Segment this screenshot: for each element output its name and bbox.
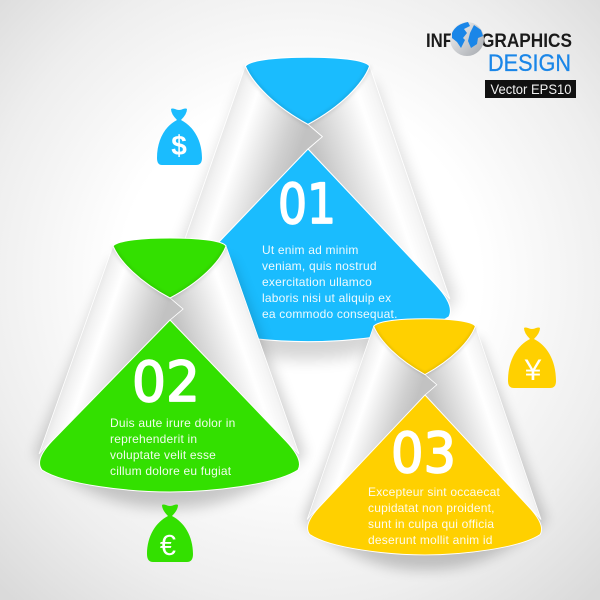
text block 01: ea commodo consequat. [262, 307, 398, 321]
text block 02: reprehenderit in [110, 432, 197, 446]
label: vector eps10: Vector EPS10 [490, 82, 572, 97]
logo title: infographics [426, 30, 572, 52]
panel: step 01 blue cone [160, 57, 456, 360]
text block 03: deserunt mollit anim id [368, 533, 493, 547]
text block 01: exercitation ullamco [262, 275, 372, 289]
number 03: 03 [391, 421, 456, 485]
icon: dollar money bag [157, 108, 202, 165]
text block 01: veniam, quis nostrud [262, 259, 377, 273]
panel: step 03 yellow cone [304, 319, 546, 570]
text block 02 [110, 416, 236, 478]
text block 03: Excepteur sint occaecat [368, 485, 500, 499]
icon: dollar money bag: $ [171, 130, 187, 161]
text block 02: Duis aute irure dolor in [110, 416, 236, 430]
text block 03: cupidatat non proident, [368, 501, 495, 515]
icon: globe [450, 22, 484, 56]
logo [426, 22, 576, 98]
number 02: 02 [132, 350, 200, 414]
panel: step 02 green cone [35, 238, 305, 508]
icon: euro money bag [147, 504, 193, 562]
icon: yen money bag: ¥ [524, 354, 542, 387]
text block 03: sunt in culpa qui officia [368, 517, 494, 531]
text block 01: Ut enim ad minim [262, 243, 359, 257]
logo title: infographics: GRAPHICS [481, 30, 572, 52]
logo title: infographics: INF [426, 30, 453, 52]
number 01: 01 [278, 172, 336, 236]
icon: euro money bag: € [160, 530, 176, 562]
text block 03 [368, 485, 500, 547]
text block 01 [262, 243, 398, 321]
text block 01: laboris nisi ut aliquip ex [262, 291, 391, 305]
text block 02: cillum dolore eu fugiat [110, 464, 232, 478]
icon: yen money bag [508, 328, 556, 388]
logo subtitle: design: DESIGN [488, 50, 571, 77]
text block 02: voluptate velit esse [110, 448, 216, 462]
